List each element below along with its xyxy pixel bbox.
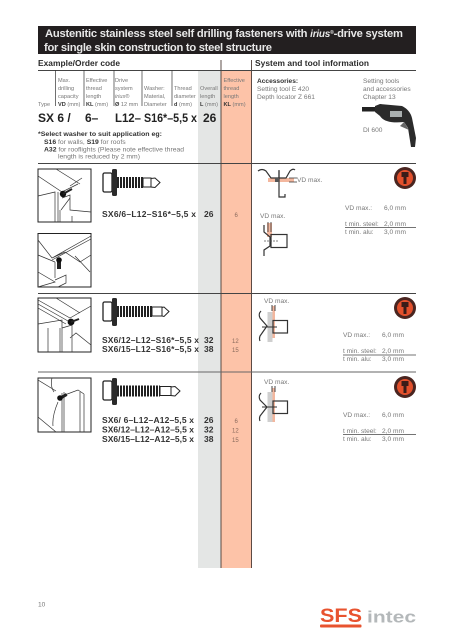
table column headers: thread [224,86,239,92]
table column headers: Type [38,102,50,108]
specs row 1: 3,0 mm [384,229,406,236]
table column headers: Washer: [144,86,165,92]
table column headers: VD (mm) [58,102,81,108]
header column ticks [56,70,172,106]
specs row 2: 6,0 mm [382,332,404,339]
specs row 2: t min. steel: [343,348,377,355]
application drawing 1b [38,234,91,287]
specs row 2 [343,332,416,363]
order code example: S16*–5,5 x [144,111,197,125]
accessories [257,78,315,101]
table column headers: length [86,94,101,100]
order codes row 2: SX6/15–L12–S16*–5,5 x [102,344,199,354]
specs row 1: 6,0 mm [384,205,406,212]
order codes row 2: SX6/12–L12–S16*–5,5 x [102,335,199,345]
washer note: length is reduced by 2 mm) [58,154,140,160]
application drawing 2 [38,298,91,352]
logo: SFS intec: SFS [320,605,362,627]
section rules [38,70,416,372]
setting tools reference: and accessories [363,86,411,93]
order code example: 26 [203,111,217,125]
setting tools reference: Setting tools [363,78,400,85]
table column headers: length [200,94,215,100]
setting tools reference [363,78,411,101]
column divider lines [221,60,252,568]
specs row 3: 2,0 mm [382,428,404,435]
order code example: SX 6 / [38,111,71,125]
table column headers: KL (mm) [86,102,108,108]
effective lengths row 3 [232,419,239,444]
table column headers: diameter [174,94,196,100]
specs row 2: 2,0 mm [382,348,404,355]
setting tools reference: Chapter 13 [363,94,396,101]
title bar [38,26,416,54]
order codes row 3: SX6/15–L12–A12–5,5 x [102,434,194,444]
specs row 3: VD max.: [343,412,370,419]
label: VD max roof: VD max. [297,177,322,184]
icon: drill [362,104,416,147]
title bar: ® [330,29,334,36]
order code example: L12– [115,111,141,125]
overall lengths row 3: 26 [204,415,214,425]
order codes row 1: SX6/6–L12–S16*–5,5 x [102,209,196,219]
label: VD max row 2: VD max. [264,298,289,305]
icon: drive badge 1 [394,167,416,189]
label: DI 600: DI 600 [363,127,383,134]
overall length row 1: 26 [204,209,214,219]
overall lengths row 2: 32 [204,335,214,345]
table column headers: d (mm) [174,102,192,108]
accessories: Depth locator Z 661 [257,94,315,101]
table column headers: capacity [58,94,79,100]
table column headers: Thread [174,86,192,92]
heading: system and tool information: System and tool information [255,58,369,68]
effective lengths row 2: 15 [232,348,239,354]
table column headers: Effective [86,78,107,84]
icon: screw medium [103,298,169,326]
specs row 3: t min. steel: [343,428,377,435]
specs row 3: t min. alu: [343,436,372,443]
page number: 10 [38,602,46,608]
specs row 2: t min. alu: [343,356,372,363]
table column headers: drilling [58,86,74,92]
table column headers: irius® [115,93,130,100]
specs row 2: VD max.: [343,332,370,339]
effective lengths row 2: 12 [232,339,239,345]
gray overall length column [198,70,221,568]
accessories: Setting tool E 420 [257,86,309,93]
peach effective thread length column [221,70,252,568]
overall lengths row 3: 38 [204,434,214,444]
specs row 3: 6,0 mm [382,412,404,419]
table column headers: KL (mm) [224,102,246,108]
title bar: -drive system [334,28,403,40]
overall lengths row 2: 38 [204,344,214,354]
overall lengths row 3: 32 [204,424,214,434]
specs row 1 [345,205,416,236]
washer note [38,131,184,160]
table column headers: Overall [200,86,218,92]
icon: screw short [103,169,160,196]
order code example: 6– [85,111,99,125]
effective lengths row 2 [232,339,239,354]
label: VD max row 3: VD max. [264,379,289,386]
order codes row 2 [102,335,199,354]
specs row 1: VD max.: [345,205,372,212]
section diagram: roof profile [258,169,297,197]
logo: SFS intec [320,605,416,628]
table column headers: Drive [115,78,128,84]
accessories: Accessories: [257,78,298,85]
icon: drive badge 2 [394,297,416,319]
section diagram: wall 2 [259,305,288,342]
specs row 1: t min. alu: [345,229,374,236]
table column headers: length [224,94,239,100]
section diagram: wall 1 [264,222,287,256]
specs row 1: t min. steel: [345,221,379,228]
heading: example/order code: Example/Order code [38,58,120,68]
table column headers: thread [86,86,102,92]
table column headers: Ø 12 mm [115,102,138,108]
specs row 1: 2,0 mm [384,221,406,228]
label: VD max wall: VD max. [260,213,285,220]
section diagram: wall 3 [259,386,288,422]
effective lengths row 3: 12 [232,428,239,434]
table column headers: Diameter [144,102,167,108]
order codes row 3: SX6/12–L12–A12–5,5 x [102,424,194,434]
title bar: Austenitic stainless steel self drilling fasteners with irius [45,28,330,40]
order codes row 3: SX6/ 6–L12–A12–5,5 x [102,415,194,425]
effective length row 1: 6 [234,213,238,219]
title bar: for single skin construction to steel structure [44,42,272,54]
table column headers [38,78,246,108]
icon: screw long [103,378,180,405]
table column headers: Effective [224,78,245,84]
washer note: A32 for rooflights (Please note effective thread [44,146,184,154]
icon: drive badge 3 [394,376,416,398]
application drawing 3 [38,378,91,432]
order codes row 3 [102,415,194,444]
washer note: S16 for walls, S19 for roofs [44,139,126,146]
logo: SFS intec: intec [367,608,416,626]
effective lengths row 3: 6 [234,419,238,425]
specs row 3 [343,412,416,443]
table column headers: Material, [144,94,166,100]
specs row 3: 3,0 mm [382,436,404,443]
overall lengths row 3 [204,415,214,444]
table column headers: system [115,86,133,92]
specs row 2: 3,0 mm [382,356,404,363]
order code example [38,111,217,125]
table column headers: Max. [58,78,71,84]
table column headers: L (mm) [200,102,218,108]
effective lengths row 3: 15 [232,438,239,444]
application drawing 1a [38,169,91,222]
washer note: *Select washer to suit application eg: [38,131,162,138]
overall lengths row 2 [204,335,214,354]
